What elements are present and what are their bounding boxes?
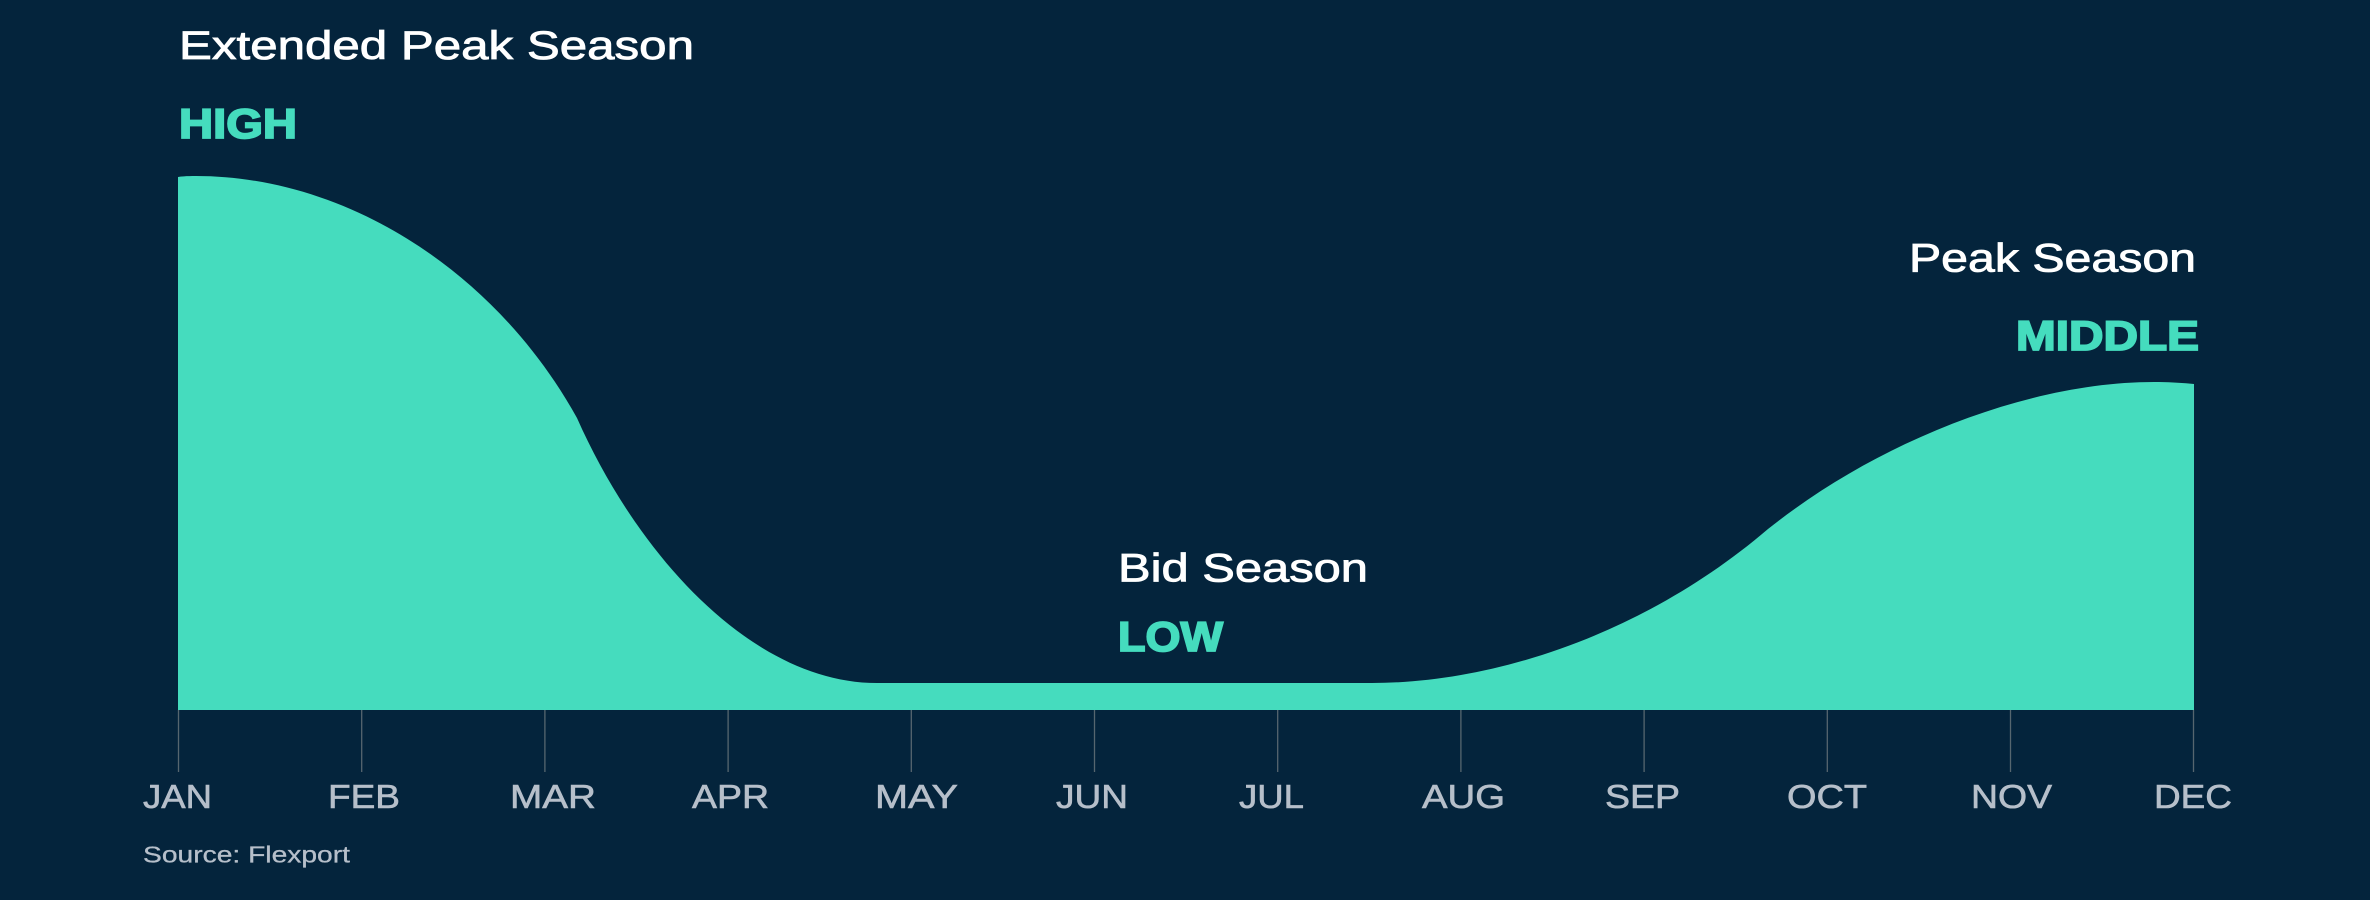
- x-axis month labels: MAR: [510, 778, 596, 815]
- x-axis month labels: JAN: [143, 778, 212, 815]
- x-axis month labels: DEC: [2154, 778, 2232, 815]
- x-axis month labels: JUL: [1239, 778, 1304, 815]
- x-axis month labels: NOV: [1971, 778, 2052, 815]
- x-axis month labels: FEB: [328, 778, 400, 815]
- heading: extended peak season: Extended Peak Season: [179, 24, 694, 68]
- x-axis month labels: MAY: [875, 778, 958, 815]
- heading: bid season: Bid Season: [1118, 546, 1368, 590]
- x-axis month labels: OCT: [1787, 778, 1867, 815]
- level label: low: LOW: [1118, 613, 1223, 660]
- source note: Source: Flexport: [143, 842, 351, 868]
- x-axis month labels: AUG: [1422, 778, 1505, 815]
- axis tick marks: [178, 710, 2194, 772]
- area chart: seasonal demand curve: [178, 176, 2194, 710]
- level label: middle: MIDDLE: [2016, 312, 2199, 359]
- x-axis month labels: JUN: [1056, 778, 1128, 815]
- x-axis month labels: APR: [692, 778, 769, 815]
- heading: peak season: Peak Season: [1909, 236, 2196, 280]
- x-axis month labels: [143, 778, 2232, 815]
- level label: high: HIGH: [179, 100, 297, 147]
- x-axis month labels: SEP: [1605, 778, 1680, 815]
